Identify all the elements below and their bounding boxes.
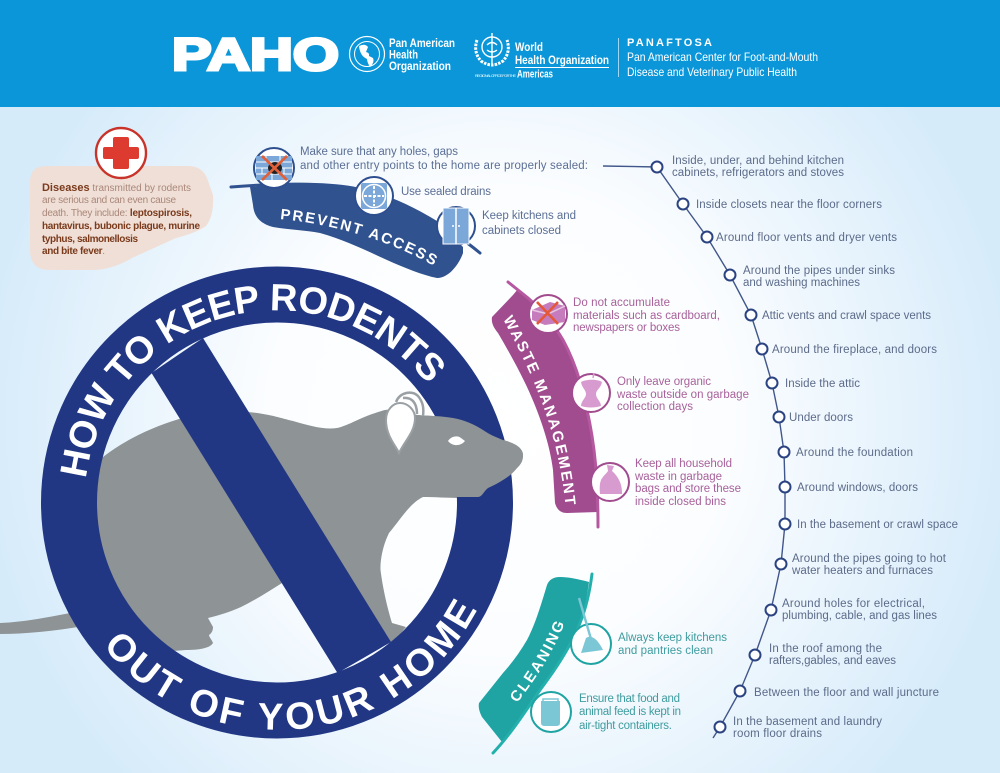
PAHO name: Organization [389,59,451,73]
text: keep closed: cabinets closed [482,225,561,237]
timeline labels: Around the pipes going to hot [792,553,947,565]
text: garbage bags: inside closed bins [635,496,726,508]
timeline labels: and washing machines [743,277,860,289]
icon: cabinet [437,207,475,245]
text: keep closed: Keep kitchens and [482,210,576,222]
diseases callout [30,128,213,270]
PANAFTOSA name: PANAFTOSA [627,37,712,49]
title: out of your home: OUT OF YOUR HOME [108,598,477,730]
diseases callout: hantavirus, bubonic plague, murine [42,221,200,232]
timeline labels: room floor drains [733,728,822,740]
text: air-tight containers: Ensure that food and [579,693,680,705]
PAHO name: Health [389,48,418,62]
timeline nodes [652,162,790,732]
text: keep closed [482,210,576,237]
checklist timeline [603,155,958,740]
icon: apple core [572,373,610,412]
text: garbage bags: waste in garbage [634,471,722,483]
timeline labels: Inside the attic [785,378,860,390]
text: cardboard [573,297,720,334]
icon: PAHO emblem [350,36,384,72]
icon: container [531,692,571,732]
WHO regional office [475,68,553,80]
PANAFTOSA name: Disease and Veterinary Public Health [627,65,797,79]
panel: prevent access [230,146,588,278]
timeline labels: Around the foundation [796,447,913,459]
prohibition ring [69,294,485,710]
timeline line [603,166,785,738]
icon: sealed drain [355,177,393,215]
text: sealed drains: Use sealed drains [401,186,491,198]
icon: rat eye [448,436,465,445]
timeline labels: Around windows, doors [797,482,918,494]
banner [250,185,463,278]
title: how to keep rodents: HOW TO KEEP RODENTS [60,284,444,476]
timeline labels: plumbing, cable, and gas lines [782,610,937,622]
text: seal entry points: and other entry points to the home are properly sealed: [300,160,588,172]
rat body [0,410,523,652]
icon: WHO emblem [476,33,508,65]
WHO name: World [515,40,543,54]
text: kitchens clean [618,632,727,657]
icon: rat ears [386,393,423,453]
timeline labels: rafters,gables, and eaves [769,655,896,667]
timeline labels: In the basement or crawl space [797,519,958,531]
timeline labels: water heaters and furnaces [791,565,933,577]
WHO name [515,40,609,67]
text: air-tight containers [579,693,681,732]
banner label: WASTE MANAGEMENT [504,314,576,504]
timeline labels: Between the floor and wall juncture [754,687,939,699]
text: kitchens clean: Always keep kitchens [618,632,727,644]
panel: cleaning [478,572,727,755]
text: air-tight containers: air-tight containers. [579,720,672,732]
banner [479,577,589,742]
text: cardboard: Do not accumulate [573,297,670,309]
timeline labels: Around the pipes under sinks [743,265,895,277]
text: garbage bags: bags and store these [635,483,741,495]
diseases callout: are serious and can even cause [42,195,176,206]
icon: sealed wall [254,148,294,188]
PAHO name [389,36,455,73]
timeline labels: Around holes for electrical, [782,598,925,610]
banner label: PREVENT ACCESS [281,208,437,264]
text: cardboard: materials such as cardboard, [573,310,720,322]
diseases callout: death. They include: leptospirosis, [42,208,192,219]
panel: waste management [492,280,749,528]
text: organic waste [616,376,749,413]
WHO regional office: REGIONAL OFFICE FOR THE [475,73,516,78]
text: garbage bags: Keep all household [635,458,732,470]
prohibition bar [152,338,391,673]
timeline labels: Inside closets near the floor corners [696,199,882,211]
text: organic waste: collection days [617,401,693,413]
header band [0,0,1000,107]
PANAFTOSA name [627,37,818,79]
timeline labels: Inside, under, and behind kitchen [672,155,844,167]
PANAFTOSA name: Pan American Center for Foot-and-Mouth [627,50,818,64]
diseases callout: typhus, salmonellosis [42,234,138,245]
PAHO wordmark: PAHO [172,29,339,80]
text: seal entry points: Make sure that any holes, gaps [300,146,458,158]
text: organic waste: waste outside on garbage [616,389,749,401]
icon: cardboard [529,295,567,333]
text: seal entry points [300,146,588,172]
timeline labels: In the roof among the [769,643,882,655]
WHO name: Health Organization [515,53,609,67]
timeline labels: cabinets, refrigerators and stoves [672,167,844,179]
icon: broom [571,598,611,664]
WHO regional office: Americas [517,68,553,80]
diseases callout: Diseases transmitted by rodents [42,182,191,194]
text: organic waste: Only leave organic [617,376,711,388]
timeline labels [672,155,958,740]
banner label: CLEANING [510,622,564,701]
timeline labels: Around floor vents and dryer vents [716,232,897,244]
diseases callout: and bite fever. [42,246,105,257]
PAHO name: Pan American [389,36,455,50]
timeline labels: Around the fireplace, and doors [772,344,937,356]
timeline labels: In the basement and laundry [733,716,882,728]
timeline labels: Under doors [789,412,853,424]
text: garbage bags [634,458,741,508]
timeline labels: Attic vents and crawl space vents [762,310,931,322]
icon: red cross [96,128,146,178]
text: air-tight containers: animal feed is kept in [579,706,681,718]
text: kitchens clean: and pantries clean [618,645,713,657]
rat head over ring [385,393,523,500]
banner [492,289,598,513]
text: cardboard: newspapers or boxes [573,322,680,334]
icon: garbage bag [591,463,629,501]
